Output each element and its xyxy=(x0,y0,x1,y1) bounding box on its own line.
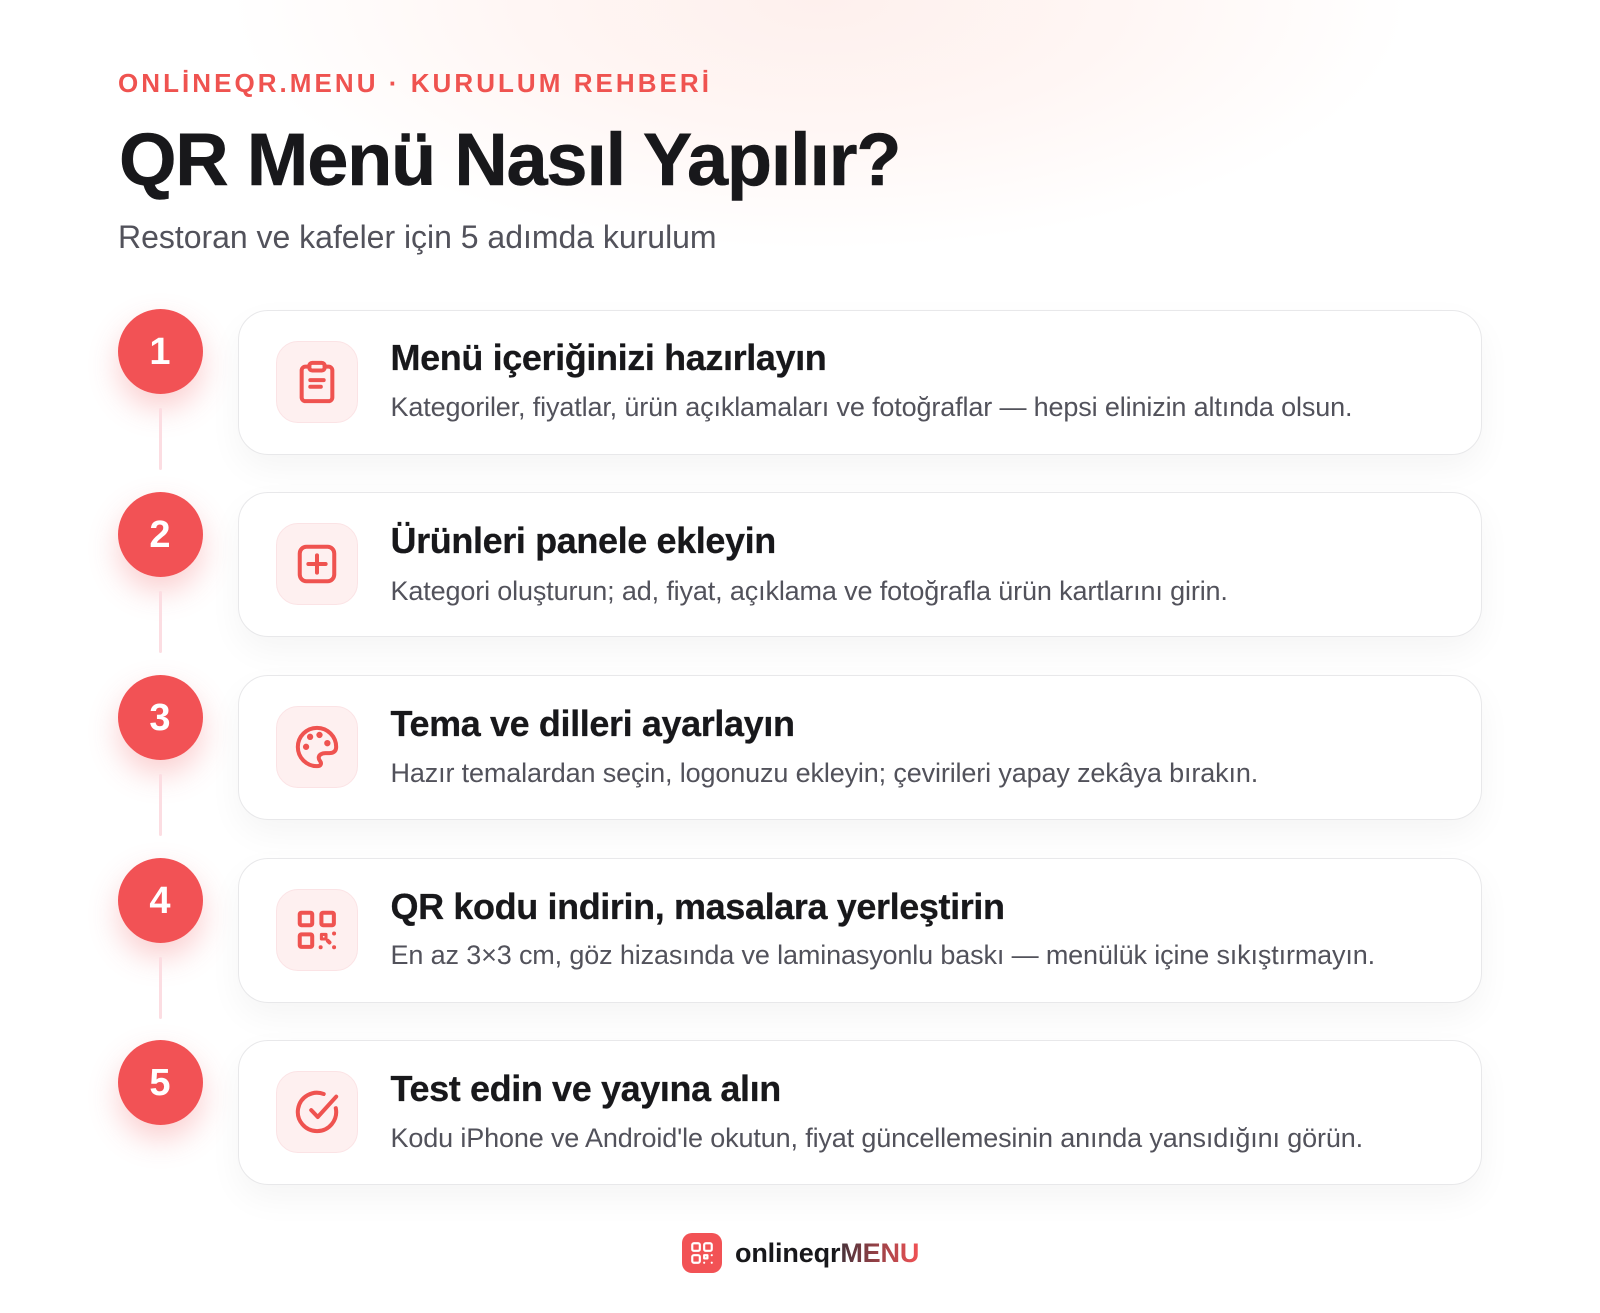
icon: palette xyxy=(276,706,358,788)
step number 3 xyxy=(118,675,202,760)
icon: qr code xyxy=(276,888,358,970)
icon: circle check xyxy=(276,1071,358,1153)
step number 5 xyxy=(118,1040,202,1125)
connector line 1 xyxy=(158,408,162,470)
icon: clipboard xyxy=(276,341,358,423)
step 3 heading: Tema ve dilleri ayarlayın xyxy=(390,703,795,744)
icon: logo xyxy=(682,1233,722,1273)
icon: square plus xyxy=(276,523,358,605)
step number 1: 1 xyxy=(149,331,171,373)
panel: step 5 xyxy=(238,1040,1482,1185)
title: QR Menü Nasıl Yapılır? xyxy=(119,118,900,201)
step 5 heading: Test edin ve yayına alın xyxy=(390,1068,781,1109)
subtitle: Restoran ve kafeler için 5 adımda kurulum xyxy=(118,219,717,255)
step 4 heading: QR kodu indirin, masalara yerleştirin xyxy=(390,886,1005,926)
panel: step 2 xyxy=(238,492,1482,637)
step 1 heading: Menü içeriğinizi hazırlayın xyxy=(390,337,826,378)
step 2 description: Kategori oluşturun; ad, fiyat, açıklama ve fotoğrafla ürün kartlarını girin. xyxy=(390,576,1228,606)
connector line 4 xyxy=(158,957,162,1019)
step 5 description: Kodu iPhone ve Android'le okutun, fiyat güncellemesinin anında yansıdığını görün. xyxy=(390,1122,1363,1152)
panel: step 1 xyxy=(238,310,1482,455)
step number 4: 4 xyxy=(149,880,171,922)
step 1 description: Kategoriler, fiyatlar, ürün açıklamaları ve fotoğraflar — hepsi elinizin altında olsun. xyxy=(390,392,1352,422)
connector line 2 xyxy=(158,591,162,653)
step 2 heading: Ürünleri panele ekleyin xyxy=(390,520,776,561)
step 3 description: Hazır temalardan seçin, logonuzu ekleyin; çevirileri yapay zekâya bırakın. xyxy=(390,758,1258,788)
footer brand xyxy=(682,1233,919,1273)
step number 3: 3 xyxy=(149,697,171,739)
step number 5: 5 xyxy=(149,1062,171,1104)
step number 4 xyxy=(118,858,202,943)
panel: step 3 xyxy=(238,675,1482,820)
brand name: onlineqrMENU xyxy=(735,1238,919,1268)
step 4 description: En az 3×3 cm, göz hizasında ve laminasyonlu baskı — menülük içine sıkıştırmayın. xyxy=(390,940,1375,970)
connector line 3 xyxy=(158,774,162,836)
panel: step 4 xyxy=(238,858,1482,1002)
step number 2 xyxy=(118,492,202,577)
step number 2: 2 xyxy=(149,514,171,556)
eyebrow: ONLİNEQR.MENU · KURULUM REHBERİ xyxy=(118,68,712,98)
step number 1 xyxy=(118,309,202,394)
